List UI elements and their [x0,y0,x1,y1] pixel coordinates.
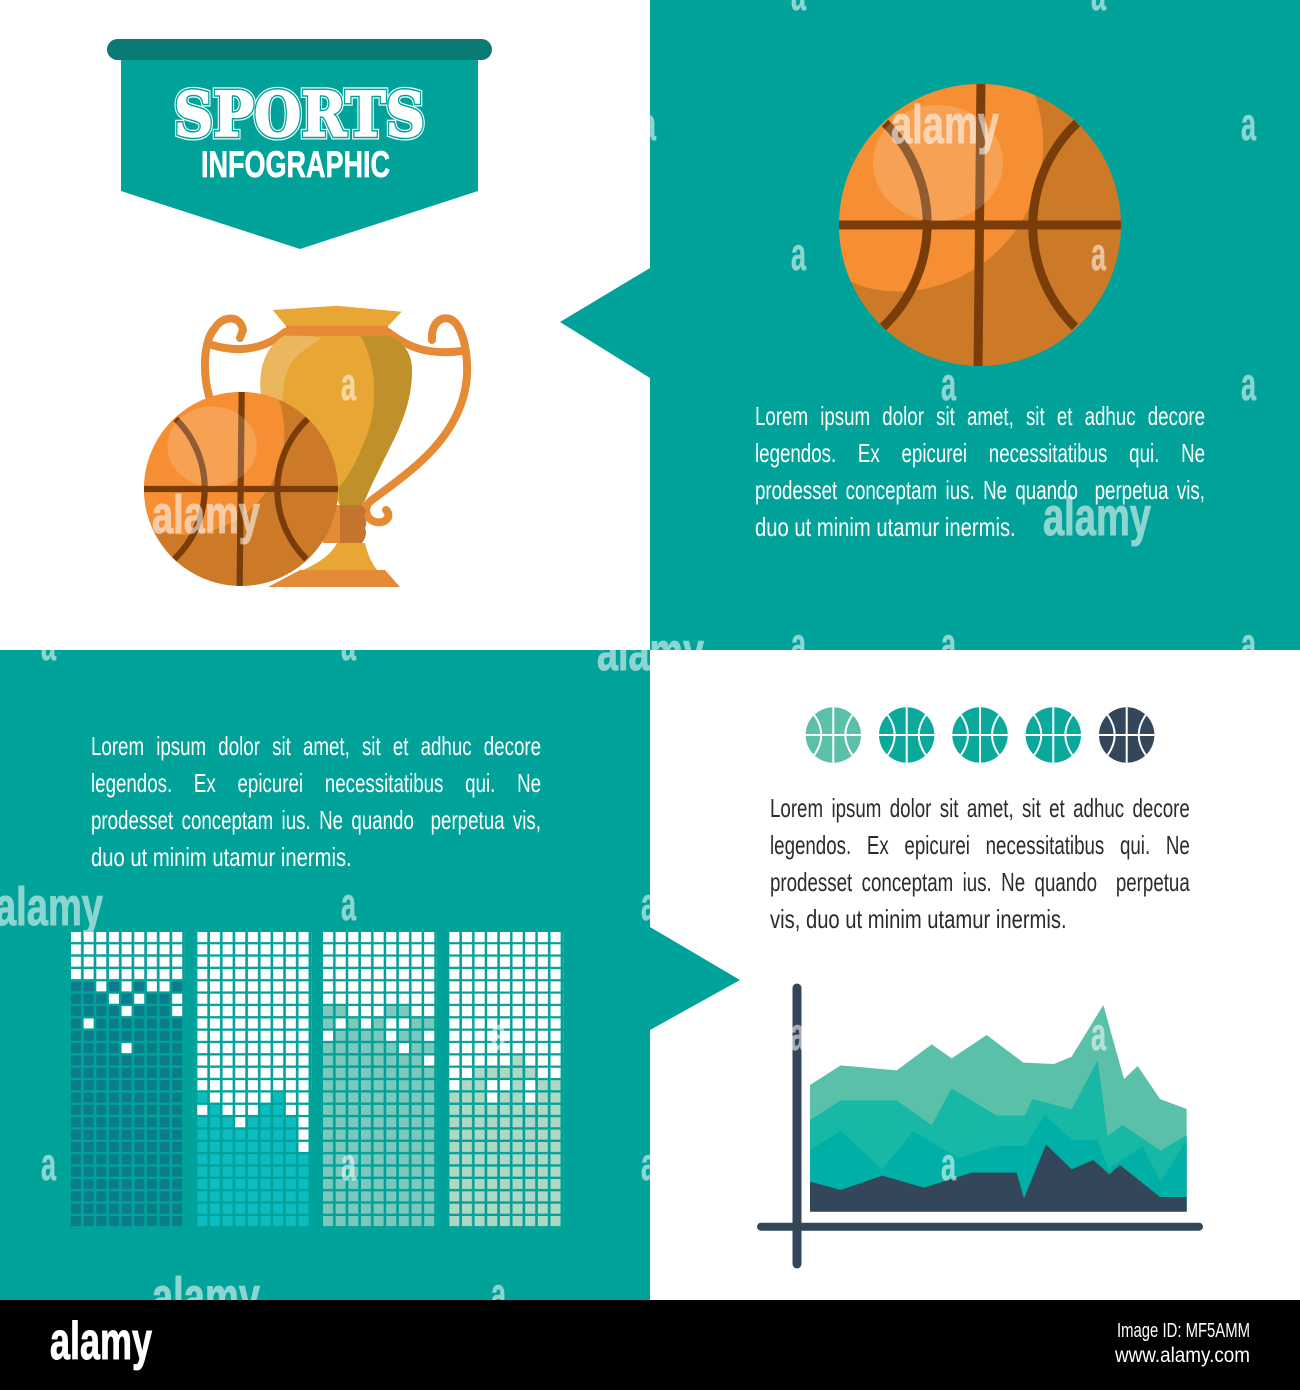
text block: bottom right paragraph: legendos. Ex epicurei necessitatibus qui. Ne [770,830,1190,860]
banner rod [107,39,492,60]
watermarks: a [341,1138,356,1190]
watermarks: a [491,1008,506,1060]
text block: bottom left paragraph: legendos. Ex epicurei necessitatibus qui. Ne [91,768,541,798]
banner title [107,39,492,249]
trophy rim [273,306,402,326]
text block: bottom left paragraph: duo ut minim utamur inermis. [91,842,352,872]
watermarks: a [41,1138,56,1190]
text block: bottom left paragraph: prodesset conceptam ius. Ne quando perpetua vis, [91,805,541,835]
pixel column 3 [323,932,437,1228]
footer logo: alamy [50,1312,152,1371]
text block: bottom right paragraph: prodesset conceptam ius. Ne quando perpetua [770,867,1190,897]
pixel column 1 [71,932,185,1228]
watermarks: a [1241,358,1256,410]
title: SPORTS: SPORTS [174,78,425,151]
watermarks: a [791,618,806,670]
watermarks: alamy [597,622,704,682]
icon: dark navy ball [1099,707,1154,763]
watermarks: a [491,1268,506,1320]
trophy stem and base [323,505,340,543]
banner body [121,60,478,249]
pixel bar chart [71,932,563,1228]
chart axes [761,988,1199,1264]
text block: bottom right paragraph: vis, duo ut minim utamur inermis. [770,904,1067,934]
trophy cup [260,335,412,505]
footer bar [0,1300,1300,1390]
text block: bottom right paragraph [770,793,1190,934]
text block: top right paragraph: Lorem ipsum dolor sit amet, sit et adhuc decore [755,401,1205,431]
watermarks: a [341,618,356,670]
watermarks: a [341,358,356,410]
text block: bottom left paragraph [91,731,541,872]
icon: small orange basketball [144,392,338,586]
watermarks: alamy [152,1267,260,1327]
icon: large orange basketball [839,84,1121,366]
icon: light teal ball [806,707,861,763]
watermarks: a [1091,228,1106,280]
icon: trophy [205,306,467,587]
text block: top right paragraph: duo ut minim utamur inermis. [755,512,1016,542]
watermarks: a [941,618,956,670]
text block: top right paragraph: legendos. Ex epicurei necessitatibus qui. Ne [755,438,1205,468]
text block: bottom left paragraph: Lorem ipsum dolor sit amet, sit et adhuc decore [91,731,541,761]
panel: bottom left teal speech box [0,650,740,1300]
icon: teal ball 1 [879,707,934,763]
watermarks: a [641,98,656,150]
icon: teal ball 2 [952,707,1008,763]
watermarks: a [341,878,356,930]
text block: bottom right paragraph: Lorem ipsum dolor sit amet, sit et adhuc decore [770,793,1190,823]
pixel column 4 [449,932,563,1228]
watermarks: alamy [891,95,999,155]
watermarks: a [1241,618,1256,670]
footer image id: Image ID: MF5AMM [1117,1320,1250,1342]
icon: teal ball 3 [1026,707,1081,763]
footer url: www.alamy.com [1114,1344,1250,1367]
watermarks: alamy [152,485,260,545]
watermarks: alamy [1043,487,1151,547]
watermarks: a [1241,98,1256,150]
watermarks: a [1091,1008,1106,1060]
watermarks: a [791,228,806,280]
watermarks: a [941,358,956,410]
area chart [761,988,1199,1264]
text block: top right paragraph [755,401,1205,542]
watermarks: a [941,1138,956,1190]
title: SPORTS: SPORTS [174,78,425,151]
basketball icon row [806,707,1154,763]
watermarks: a [641,1138,656,1190]
watermarks: a [641,878,656,930]
text block: top right paragraph: prodesset conceptam ius. Ne quando perpetua vis, [755,475,1205,505]
chart areas [810,1005,1187,1212]
trophy handles [205,318,467,522]
watermarks: a [41,618,56,670]
panel: top right teal speech box [560,0,1300,650]
pixel column 2 [197,932,311,1228]
title: INFOGRAPHIC: INFOGRAPHIC [201,144,390,185]
title: SPORTS: SPORTS [174,78,425,151]
watermarks: a [790,1008,805,1060]
